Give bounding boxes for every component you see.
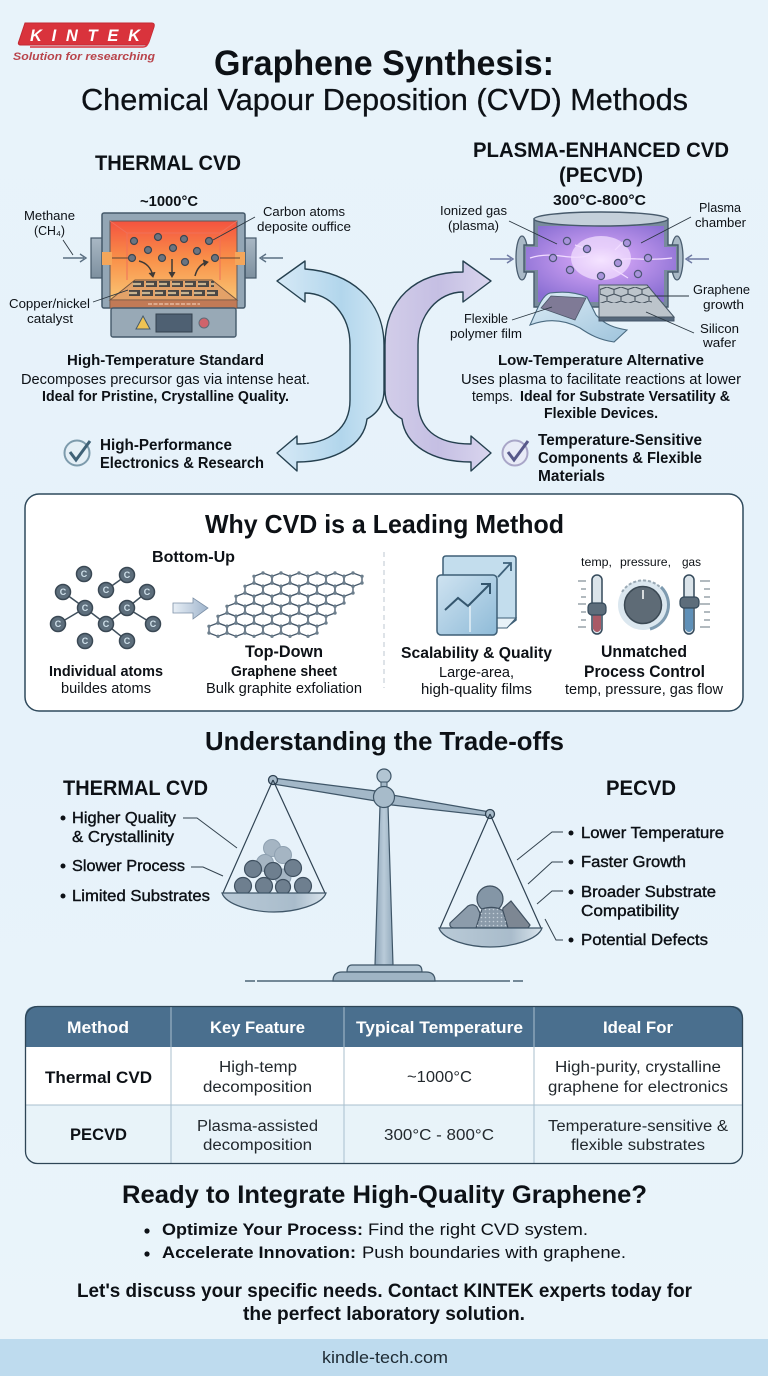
- heading: thermal CVD: THERMAL CVD: [95, 152, 241, 175]
- labels: plasma chamber callouts: Flexible: [464, 311, 508, 326]
- icon: individual carbon atoms: C: [82, 603, 89, 613]
- illustration: thermal furnace: [91, 213, 256, 337]
- labels: thermal furnace callouts: Copper/nickel: [9, 296, 90, 311]
- heading: PECVD: PLASMA-ENHANCED CVD: [473, 139, 729, 162]
- flow arrow: plasma top: [385, 261, 491, 471]
- footer: [0, 1339, 768, 1376]
- text block: PECVD description: Flexible Devices.: [544, 405, 658, 422]
- heading: why CVD: Why CVD is a Leading Method: [205, 509, 564, 539]
- icon: individual carbon atoms: C: [103, 619, 110, 629]
- text: top-down: [206, 642, 362, 697]
- icon: process controls: [578, 555, 710, 634]
- table row: PECVD: [70, 1118, 729, 1154]
- table row: PECVD: decomposition: [203, 1137, 312, 1154]
- labels: plasma chamber callouts: (plasma): [448, 218, 499, 233]
- labels: plasma chamber callouts: Silicon: [700, 321, 739, 336]
- heading: PECVD: [473, 139, 729, 187]
- arrow: atoms to sheet: [173, 598, 208, 619]
- text: individual atoms: buildes atoms: [61, 680, 151, 697]
- logo: KINTEK: [13, 23, 155, 63]
- heading: PECVD: (PECVD): [559, 164, 643, 187]
- list: thermal trade-offs: Higher Quality: [72, 810, 176, 827]
- left pan with spheres: [222, 780, 326, 912]
- outcome: PECVD application: Components & Flexible: [538, 450, 702, 467]
- labels: plasma chamber callouts: polymer film: [450, 326, 522, 341]
- call to action: Ready to Integrate High-Quality Graphene?: [122, 1181, 647, 1209]
- labels: thermal furnace callouts: catalyst: [27, 311, 73, 326]
- list: thermal trade-offs: [60, 777, 237, 905]
- text: scalability: [401, 645, 552, 698]
- list: thermal trade-offs: & Crystallinity: [72, 829, 174, 846]
- labels: thermal furnace callouts: (CH₄): [34, 223, 65, 238]
- icon: individual carbon atoms: C: [124, 570, 131, 580]
- text: scalability: Scalability & Quality: [401, 645, 552, 662]
- labels: plasma chamber callouts: [440, 200, 750, 350]
- text: top-down: Bulk graphite exfoliation: [206, 680, 362, 697]
- text: individual atoms: [49, 663, 163, 697]
- list: PECVD trade-offs: [517, 777, 724, 949]
- text block: PECVD description: Low-Temperature Alternative: [498, 352, 704, 369]
- labels: plasma chamber callouts: chamber: [695, 215, 747, 230]
- icon: individual carbon atoms: [50, 566, 160, 648]
- list: PECVD trade-offs: PECVD: [606, 777, 676, 800]
- list: thermal trade-offs: THERMAL CVD: [63, 777, 208, 800]
- logo: KINTEK: Solution for researching: [13, 51, 155, 63]
- title: Graphene Synthesis:: [214, 44, 554, 83]
- icon: individual carbon atoms: C: [150, 619, 157, 629]
- text: scalability: Large-area,: [439, 664, 514, 681]
- outcome: PECVD application: Temperature-Sensitive: [538, 432, 702, 449]
- text block: PECVD description: [461, 352, 741, 422]
- call to action: Let's discuss your specific needs. Contact KINTEK experts today for: [77, 1280, 692, 1302]
- footer: kindle-tech.com: [322, 1349, 448, 1367]
- table header: [67, 1018, 673, 1037]
- table header: Key Feature: [210, 1018, 305, 1037]
- icon: graphene sheet: [207, 571, 364, 638]
- icon: scalability chart: [437, 556, 516, 635]
- outcome: PECVD application: Materials: [538, 468, 605, 485]
- labels: thermal furnace callouts: Methane: [24, 208, 75, 223]
- labels: thermal furnace callouts: deposite ouffice: [257, 219, 351, 234]
- table header: Ideal For: [603, 1018, 673, 1037]
- call to action: Optimize Your Process:: [162, 1220, 363, 1239]
- text: top-down: Top-Down: [245, 642, 323, 661]
- icon: individual carbon atoms: C: [144, 587, 151, 597]
- icon: individual carbon atoms: C: [55, 619, 62, 629]
- table row: thermal CVD: [45, 1059, 728, 1096]
- call to action: [77, 1181, 692, 1325]
- icon: individual carbon atoms: C: [103, 585, 110, 595]
- icon: process controls: pressure,: [620, 555, 671, 569]
- call to action: Find the right CVD system.: [368, 1220, 588, 1239]
- table row: PECVD: flexible substrates: [571, 1137, 705, 1154]
- list: PECVD trade-offs: Faster Growth: [581, 854, 686, 871]
- list: PECVD trade-offs: Lower Temperature: [581, 825, 724, 842]
- icon: individual carbon atoms: C: [82, 636, 89, 646]
- table row: thermal CVD: Thermal CVD: [45, 1068, 152, 1087]
- labels: plasma chamber callouts: growth: [703, 297, 744, 312]
- text: process control: [565, 643, 723, 698]
- labels: thermal furnace callouts: Carbon atoms: [263, 204, 345, 219]
- table row: PECVD: 300°C - 800°C: [384, 1127, 494, 1144]
- label: thermal temperature: ~1000°C: [140, 194, 199, 210]
- table row: PECVD: Plasma-assisted: [197, 1118, 318, 1135]
- text block: thermal description: High-Temperature Standard: [67, 352, 264, 369]
- list: thermal trade-offs: Limited Substrates: [72, 888, 210, 905]
- outcome: PECVD application: [502, 432, 702, 485]
- call to action: Accelerate Innovation:: [162, 1243, 356, 1262]
- call to action: Push boundaries with graphene.: [362, 1243, 626, 1262]
- flow arrow: thermal top: [277, 261, 384, 471]
- list: PECVD trade-offs: Potential Defects: [581, 932, 708, 949]
- icon: individual carbon atoms: C: [81, 569, 88, 579]
- label: PECVD temperature: 300°C-800°C: [553, 193, 647, 209]
- table row: thermal CVD: High-purity, crystalline: [555, 1059, 721, 1076]
- logo: KINTEK: KINTEK: [30, 27, 141, 45]
- text block: PECVD description: temps.: [472, 388, 513, 405]
- icon: individual carbon atoms: C: [60, 587, 67, 597]
- icon: individual carbon atoms: C: [124, 603, 131, 613]
- title: Chemical Vapour Deposition (CVD) Methods: [81, 82, 688, 117]
- outcome: thermal application: High-Performance: [100, 437, 232, 454]
- label: bottom-up: Bottom-Up: [152, 549, 235, 566]
- icon: process controls: temp,: [581, 555, 612, 569]
- icon: process controls: gas: [682, 555, 701, 569]
- table: method comparison: [25, 1006, 743, 1164]
- labels: thermal furnace callouts: [9, 204, 351, 326]
- table row: thermal CVD: graphene for electronics: [548, 1079, 728, 1096]
- title: [81, 44, 688, 117]
- list: PECVD trade-offs: Broader Substrate: [581, 884, 716, 901]
- illustration: plasma chamber: [516, 212, 683, 342]
- text: process control: temp, pressure, gas flow: [565, 681, 723, 698]
- text: process control: Process Control: [584, 663, 705, 681]
- labels: plasma chamber callouts: Ionized gas: [440, 203, 507, 218]
- text block: PECVD description: Ideal for Substrate Versatility &: [520, 388, 730, 405]
- text block: PECVD description: Uses plasma to facilitate reactions at lower: [461, 371, 741, 388]
- illustration: balance scale: [222, 769, 542, 981]
- text: individual atoms: Individual atoms: [49, 663, 163, 680]
- call to action: the perfect laboratory solution.: [243, 1303, 525, 1325]
- table header: Typical Temperature: [356, 1018, 523, 1037]
- table row: PECVD: Temperature-sensitive &: [548, 1118, 729, 1135]
- table row: thermal CVD: decomposition: [203, 1079, 312, 1096]
- icon: individual carbon atoms: C: [124, 636, 131, 646]
- labels: plasma chamber callouts: wafer: [702, 335, 737, 350]
- table row: thermal CVD: High-temp: [219, 1059, 297, 1076]
- text: scalability: high-quality films: [421, 681, 532, 698]
- text block: thermal description: Decomposes precursor gas via intense heat.: [21, 371, 310, 388]
- list: PECVD trade-offs: Compatibility: [581, 903, 679, 920]
- text: process control: Unmatched: [601, 643, 687, 661]
- list: thermal trade-offs: Slower Process: [72, 858, 185, 875]
- labels: plasma chamber callouts: Graphene: [693, 282, 750, 297]
- outcome: thermal application: Electronics & Research: [100, 455, 264, 472]
- labels: plasma chamber callouts: Plasma: [699, 200, 742, 215]
- panel: why CVD: [25, 494, 743, 711]
- table header: Method: [67, 1018, 129, 1037]
- heading: trade-offs: Understanding the Trade-offs: [205, 726, 564, 756]
- text: top-down: Graphene sheet: [231, 663, 337, 680]
- text block: thermal description: Ideal for Pristine, Crystalline Quality.: [42, 388, 289, 405]
- table row: PECVD: PECVD: [70, 1125, 127, 1144]
- table row: thermal CVD: ~1000°C: [407, 1069, 472, 1086]
- outcome: thermal application: [64, 437, 264, 472]
- text block: thermal description: [21, 352, 310, 405]
- right pan with rocks: [439, 814, 542, 947]
